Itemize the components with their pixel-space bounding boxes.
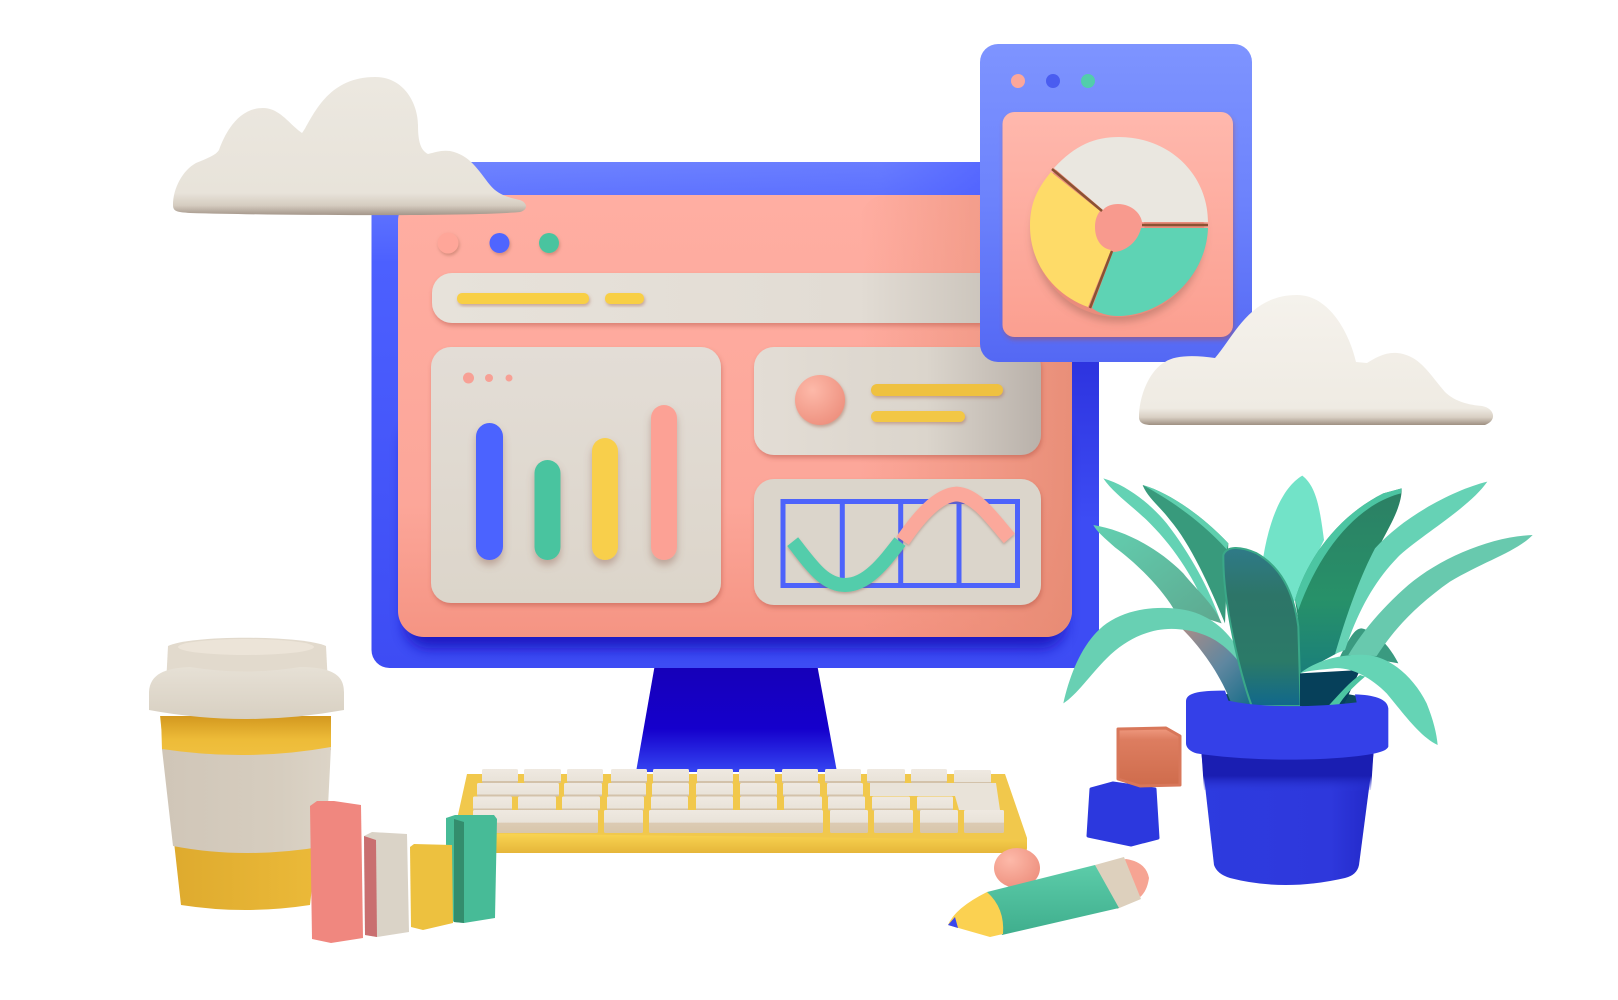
avatar circle xyxy=(795,375,845,425)
donut chart xyxy=(1030,137,1208,317)
window card xyxy=(1002,112,1233,337)
leaf: underside shade xyxy=(1182,628,1258,706)
leaf: drooping right xyxy=(1300,655,1438,745)
cup sleeve xyxy=(162,747,331,853)
keys row 4 xyxy=(473,810,1004,833)
cup lower band xyxy=(160,716,331,910)
window frame xyxy=(980,44,1252,362)
leaf: back center xyxy=(1263,476,1324,603)
pot rim xyxy=(1186,691,1388,760)
pencil body xyxy=(987,865,1119,935)
block: orange xyxy=(1118,728,1180,786)
plant pot xyxy=(1199,690,1375,885)
panel: bar chart xyxy=(431,347,721,603)
monitor xyxy=(372,162,1099,668)
leaf: far right lower xyxy=(1348,535,1533,656)
keys row 2 xyxy=(477,783,863,796)
leaf: upper inner left xyxy=(1143,485,1228,623)
slice: cream xyxy=(1054,137,1208,222)
cup upper band xyxy=(161,716,331,755)
eraser xyxy=(1115,859,1149,905)
floating window: donut chart xyxy=(980,44,1252,362)
lid top xyxy=(166,638,328,685)
lid base xyxy=(149,667,344,719)
lid opening xyxy=(178,639,314,655)
lead xyxy=(948,917,958,928)
leaf: upper left xyxy=(1103,478,1221,622)
keyboard base xyxy=(452,774,1027,853)
panel: line chart xyxy=(754,479,1041,605)
block: blue xyxy=(1088,783,1158,845)
leaf: far right upper xyxy=(1335,482,1487,654)
slice gaps xyxy=(1052,169,1208,308)
stacked blocks xyxy=(1088,728,1180,845)
pencil tip xyxy=(948,892,1003,937)
chart bars xyxy=(476,405,677,560)
slice: green xyxy=(1092,228,1208,316)
leaf: thin base xyxy=(1328,675,1365,706)
window dots xyxy=(1011,74,1095,88)
pencil xyxy=(948,857,1149,937)
text lines xyxy=(871,384,1003,422)
panel: profile summary xyxy=(754,347,1041,455)
keys row 1 xyxy=(482,769,991,784)
pot rim shadow xyxy=(1201,745,1374,792)
small 3D bar chart xyxy=(310,801,497,943)
bar: green xyxy=(446,815,497,923)
illustration: desktop analytics scene xyxy=(149,44,1532,943)
pot opening xyxy=(1199,690,1375,720)
slice: yellow xyxy=(1030,172,1111,307)
leaf: front center xyxy=(1223,548,1301,706)
bar: yellow xyxy=(410,844,453,930)
cloud: right xyxy=(1139,295,1493,425)
leaf: lower left xyxy=(1093,525,1222,623)
leaf: tall right xyxy=(1295,488,1402,673)
donut hole xyxy=(1090,200,1144,254)
chart grid xyxy=(783,501,1018,586)
metal band xyxy=(1095,857,1141,909)
panel dots xyxy=(463,372,512,384)
address bar xyxy=(432,273,1002,323)
monitor bezel xyxy=(372,162,1099,668)
plant leaves xyxy=(1063,476,1533,760)
screen xyxy=(398,195,1072,637)
bar: coral xyxy=(310,801,363,943)
coffee cup xyxy=(149,638,344,910)
window control dots xyxy=(438,232,559,254)
pot body xyxy=(1201,750,1374,885)
monitor stand xyxy=(636,664,837,772)
wave line xyxy=(793,494,1009,585)
keys row 3 xyxy=(473,796,953,810)
cloud: top left xyxy=(173,77,526,215)
leaf: arched left xyxy=(1063,608,1245,703)
bar: cream xyxy=(364,832,409,937)
enter key xyxy=(870,783,1000,810)
leaf: shadow base right xyxy=(1300,670,1360,706)
leaf: back right small xyxy=(1340,628,1398,663)
keyboard xyxy=(452,769,1027,853)
ball xyxy=(994,848,1040,888)
